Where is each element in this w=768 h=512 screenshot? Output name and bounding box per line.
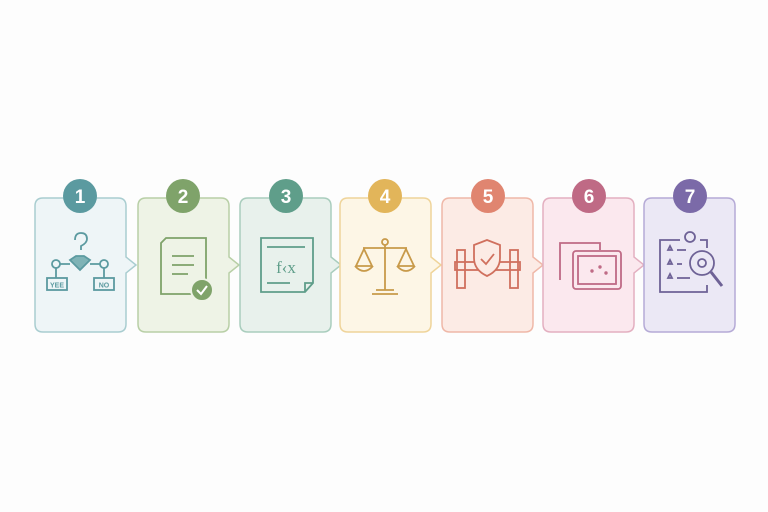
icon: formula card (261, 238, 313, 292)
badge 6 (572, 179, 606, 213)
icon: checklist with magnifier (660, 232, 722, 292)
badge 5: 5 (483, 187, 494, 208)
badge 5 (471, 179, 505, 213)
panel: step 1 (35, 179, 136, 332)
panel: step 4 (340, 179, 441, 332)
badge 6: 6 (584, 187, 594, 208)
icon: shield barrier (455, 240, 520, 288)
panel: step 1: YEE (50, 282, 64, 290)
panel: step 3: f‹x (276, 258, 296, 277)
badge 1: 1 (75, 187, 86, 208)
badge 2: 2 (178, 187, 188, 208)
badge 7: 7 (685, 187, 695, 208)
panel: step 3 (240, 179, 341, 332)
badge 3 (269, 179, 303, 213)
panel: step 1: NO (99, 282, 110, 290)
badge 4: 4 (380, 187, 391, 208)
badge 2 (166, 179, 200, 213)
badge 7 (673, 179, 707, 213)
icon: decision tree (47, 233, 114, 290)
panel: step 2 (138, 179, 239, 332)
panel: step 7 (644, 179, 735, 332)
panel: step 6 (543, 179, 644, 332)
badge 4 (368, 179, 402, 213)
badge 3: 3 (281, 187, 291, 208)
icon: scales (355, 239, 415, 294)
icon: stacked screens (560, 243, 621, 289)
badge 1 (63, 179, 97, 213)
icon: document with check (161, 238, 213, 301)
panel: step 5 (442, 179, 543, 332)
